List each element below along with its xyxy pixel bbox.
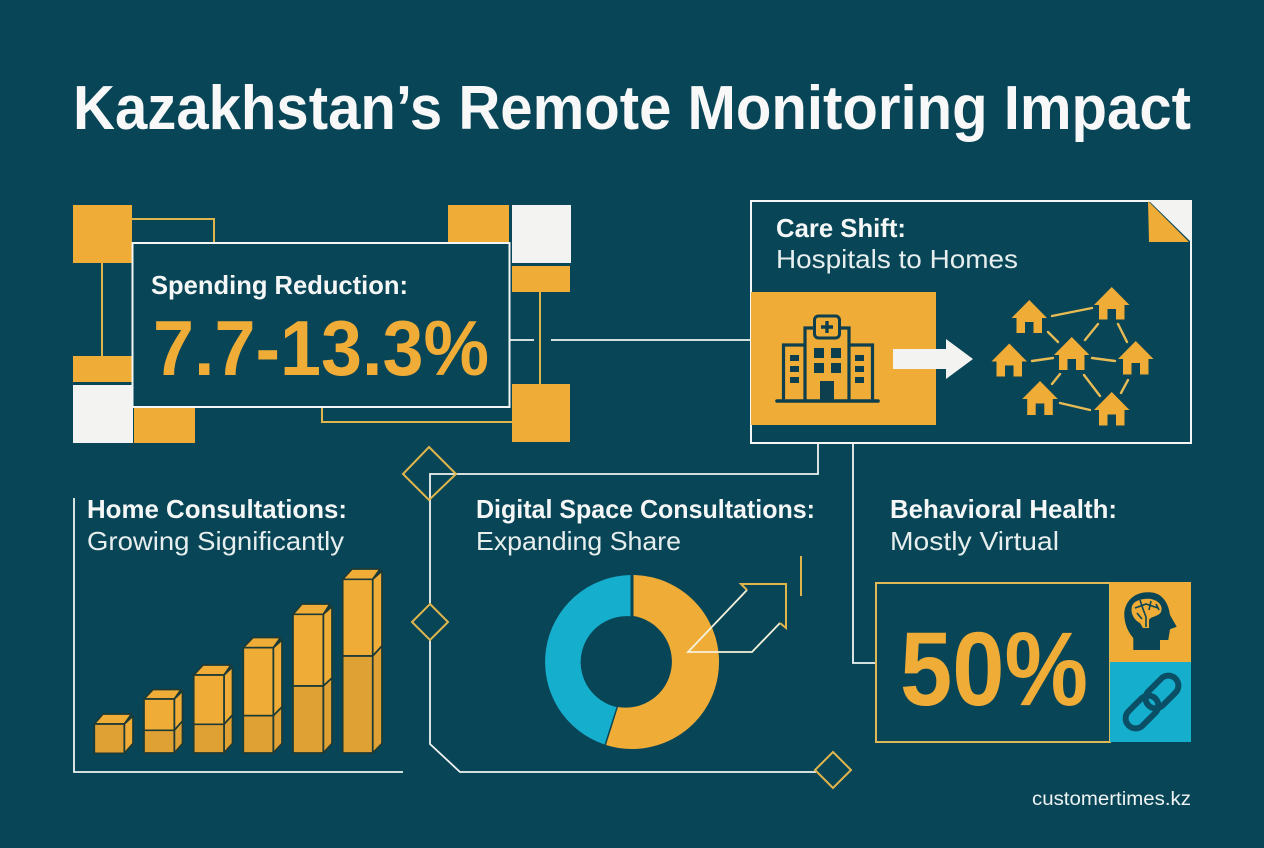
home consultations subheading: Growing Significantly xyxy=(87,526,344,556)
icon tile: brain xyxy=(1110,582,1191,662)
connector: spending to care shift xyxy=(510,339,751,341)
spending heading: Spending Reduction: xyxy=(151,270,408,300)
diamond marker bottom xyxy=(815,752,851,788)
panel: spending reduction xyxy=(73,205,571,443)
bar 3 xyxy=(194,665,232,753)
care shift heading: Care Shift: xyxy=(776,213,906,243)
bar chart xyxy=(94,569,382,753)
home network xyxy=(992,287,1154,426)
bar 5 xyxy=(293,604,332,753)
hospital tile xyxy=(751,292,936,425)
spending value: 7.7-13.3% xyxy=(153,304,489,392)
spending panel frame xyxy=(132,243,510,407)
behavioral health subheading: Mostly Virtual xyxy=(890,526,1059,556)
trend arrow xyxy=(688,556,801,652)
icon tile: link xyxy=(1110,662,1191,742)
icon: hospital xyxy=(777,316,878,401)
value frame xyxy=(876,583,1110,742)
decorative blocks around spending panel xyxy=(73,205,571,443)
behavioral value: 50% xyxy=(900,611,1088,728)
bar 2 xyxy=(144,690,182,753)
title: Kazakhstan’s Remote Monitoring Impact xyxy=(73,74,1191,143)
arrow: hospital to homes xyxy=(893,339,973,379)
bar 6 xyxy=(343,569,382,753)
footer source: customertimes.kz xyxy=(1032,789,1191,810)
donut chart xyxy=(545,575,719,749)
digital space subheading: Expanding Share xyxy=(476,526,681,556)
panel: digital space consultations xyxy=(476,494,815,749)
connector: care shift to digital space panel xyxy=(430,443,818,772)
chart axes xyxy=(74,498,403,772)
digital space heading: Digital Space Consultations: xyxy=(476,494,815,524)
panel: home consultations xyxy=(74,494,403,772)
panel: behavioral health xyxy=(876,494,1191,742)
care shift frame xyxy=(751,201,1191,443)
behavioral health heading: Behavioral Health: xyxy=(890,494,1117,524)
bar 4 xyxy=(243,638,282,753)
network links xyxy=(1032,308,1128,410)
diamond marker middle xyxy=(412,604,448,640)
diamond marker top xyxy=(403,447,456,500)
folded corner xyxy=(1148,200,1192,243)
home icons xyxy=(992,287,1154,426)
bar 1 xyxy=(94,714,133,753)
connector: care shift to behavioral health xyxy=(853,443,876,663)
panel: care shift xyxy=(751,200,1192,443)
care shift subheading: Hospitals to Homes xyxy=(776,244,1018,274)
home consultations heading: Home Consultations: xyxy=(87,494,347,524)
